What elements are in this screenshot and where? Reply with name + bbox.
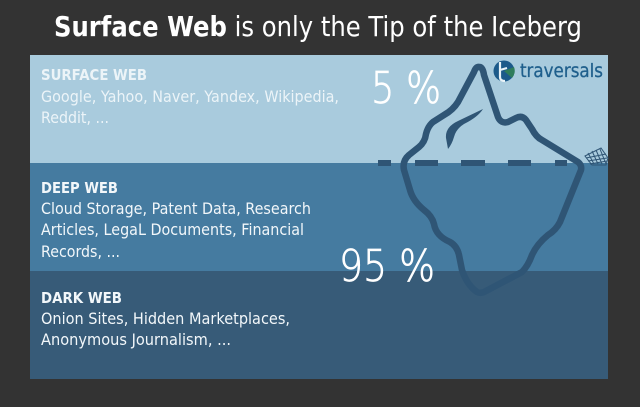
logo: traversals	[494, 60, 603, 82]
text block: dark web: Onion Sites, Hidden Marketplaces,	[41, 309, 290, 328]
icon: iceberg	[404, 67, 581, 293]
text block: deep web: Articles, LegaL Documents, Financial	[41, 220, 304, 239]
logo: traversals: traversals	[520, 60, 603, 82]
text block: surface web: Reddit, ...	[41, 108, 109, 127]
panel: dark web band	[30, 271, 608, 379]
iceberg crease	[446, 109, 483, 149]
text block: dark web: Anonymous Journalism, ...	[41, 330, 231, 349]
panel: deep web band	[30, 163, 608, 271]
text block: deep web	[41, 179, 311, 261]
stat: 5 percent: 5 %	[371, 63, 441, 114]
text block: dark web: DARK WEB	[41, 289, 122, 307]
panel: surface web band	[30, 55, 608, 163]
icon: sinking ship	[585, 148, 608, 165]
text block: surface web	[41, 66, 339, 127]
waterline dashes	[378, 160, 567, 166]
stat: 95 percent: 95 %	[339, 241, 435, 292]
text block: deep web: DEEP WEB	[41, 179, 118, 197]
text block: surface web: Google, Yahoo, Naver, Yandex, Wikipedia,	[41, 87, 339, 106]
text block: surface web: SURFACE WEB	[41, 66, 147, 84]
text block: deep web: Cloud Storage, Patent Data, Research	[41, 199, 311, 218]
text block: dark web	[41, 289, 290, 349]
text block: deep web: Records, ...	[41, 242, 120, 261]
title: Surface Web is only the Tip of the Iceberg	[54, 10, 582, 43]
